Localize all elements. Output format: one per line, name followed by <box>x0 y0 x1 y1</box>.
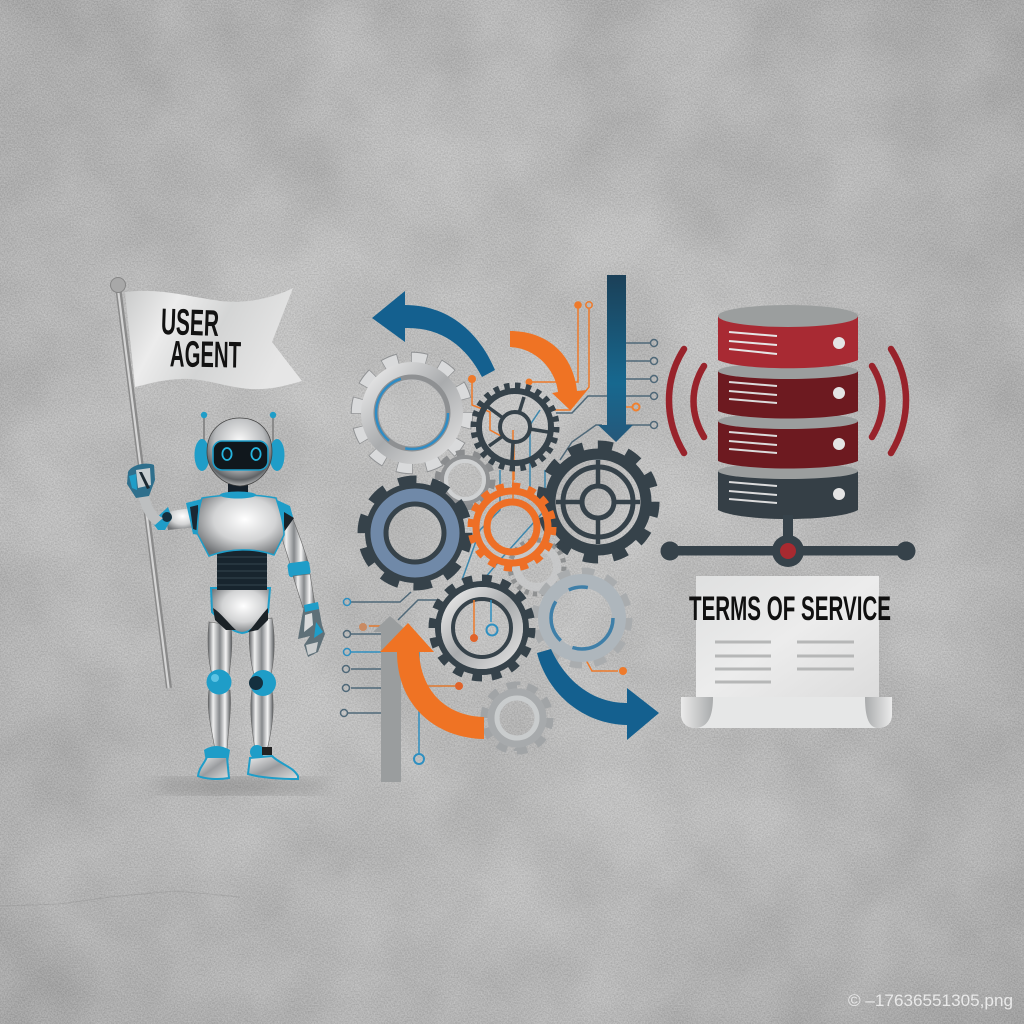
flag with pole <box>110 278 302 688</box>
arrow: blue bottom curved right <box>537 649 659 740</box>
neck <box>220 484 256 498</box>
server disk 3 <box>718 413 858 468</box>
arrow: orange bottom curved up <box>380 623 484 739</box>
gear: faded fine-toothed <box>510 540 564 594</box>
top orange traces <box>468 301 592 500</box>
right curl <box>865 697 892 728</box>
arrow: grey vertical up <box>373 616 408 782</box>
robot <box>127 412 325 779</box>
gear: orange <box>472 487 552 567</box>
server disk 2 <box>718 363 858 418</box>
server stack <box>718 305 858 519</box>
raised hand <box>127 464 155 498</box>
raised arm <box>127 464 207 536</box>
pelvis <box>211 588 270 633</box>
gear: large dark target <box>542 446 654 558</box>
robot ground shadow <box>152 778 328 794</box>
chest plate <box>197 495 284 556</box>
scroll roll <box>681 697 892 728</box>
right arm <box>276 500 325 657</box>
antennas <box>201 412 276 445</box>
left traces <box>340 592 440 716</box>
right traces with terminals <box>556 340 658 460</box>
watermark: © –17636551305,png <box>848 991 1013 1010</box>
gear: silver large <box>357 358 467 468</box>
text lines <box>715 642 854 682</box>
gear: small grey <box>438 453 492 507</box>
blue centre traces <box>462 410 545 590</box>
gear: dark fine-toothed <box>474 386 556 468</box>
signal waves <box>669 349 906 453</box>
right hand <box>298 602 325 657</box>
arrow: orange top curved <box>510 331 587 410</box>
server disk 4 <box>718 463 858 519</box>
arrow: blue top-left curved <box>372 291 495 377</box>
left curl <box>681 697 713 728</box>
headphones <box>194 439 284 471</box>
flag pole <box>118 286 169 688</box>
visor with eyes <box>213 441 268 470</box>
arrow: blue vertical down <box>598 275 633 442</box>
terms of service document <box>681 576 892 728</box>
server disk 1 <box>718 305 858 368</box>
paper sheet <box>696 576 879 698</box>
gear: dark with silver ring <box>433 579 531 677</box>
network connector <box>660 515 916 567</box>
gear centre marks <box>470 600 498 642</box>
gear: small bottom grey <box>484 685 550 751</box>
left leg <box>198 622 232 779</box>
head <box>207 418 272 486</box>
gear: dark with blue ring <box>363 481 467 585</box>
flag cloth <box>125 288 302 389</box>
gear: faded silver <box>536 572 628 664</box>
flag label line 2: AGENT <box>170 333 242 376</box>
document title: TERMS OF SERVICE <box>689 590 891 628</box>
right leg <box>248 618 298 779</box>
circuit traces <box>340 301 658 764</box>
flag label: USER <box>160 301 220 344</box>
gears cluster <box>357 358 654 751</box>
abdomen coils <box>217 550 267 590</box>
pole ball <box>110 278 126 292</box>
